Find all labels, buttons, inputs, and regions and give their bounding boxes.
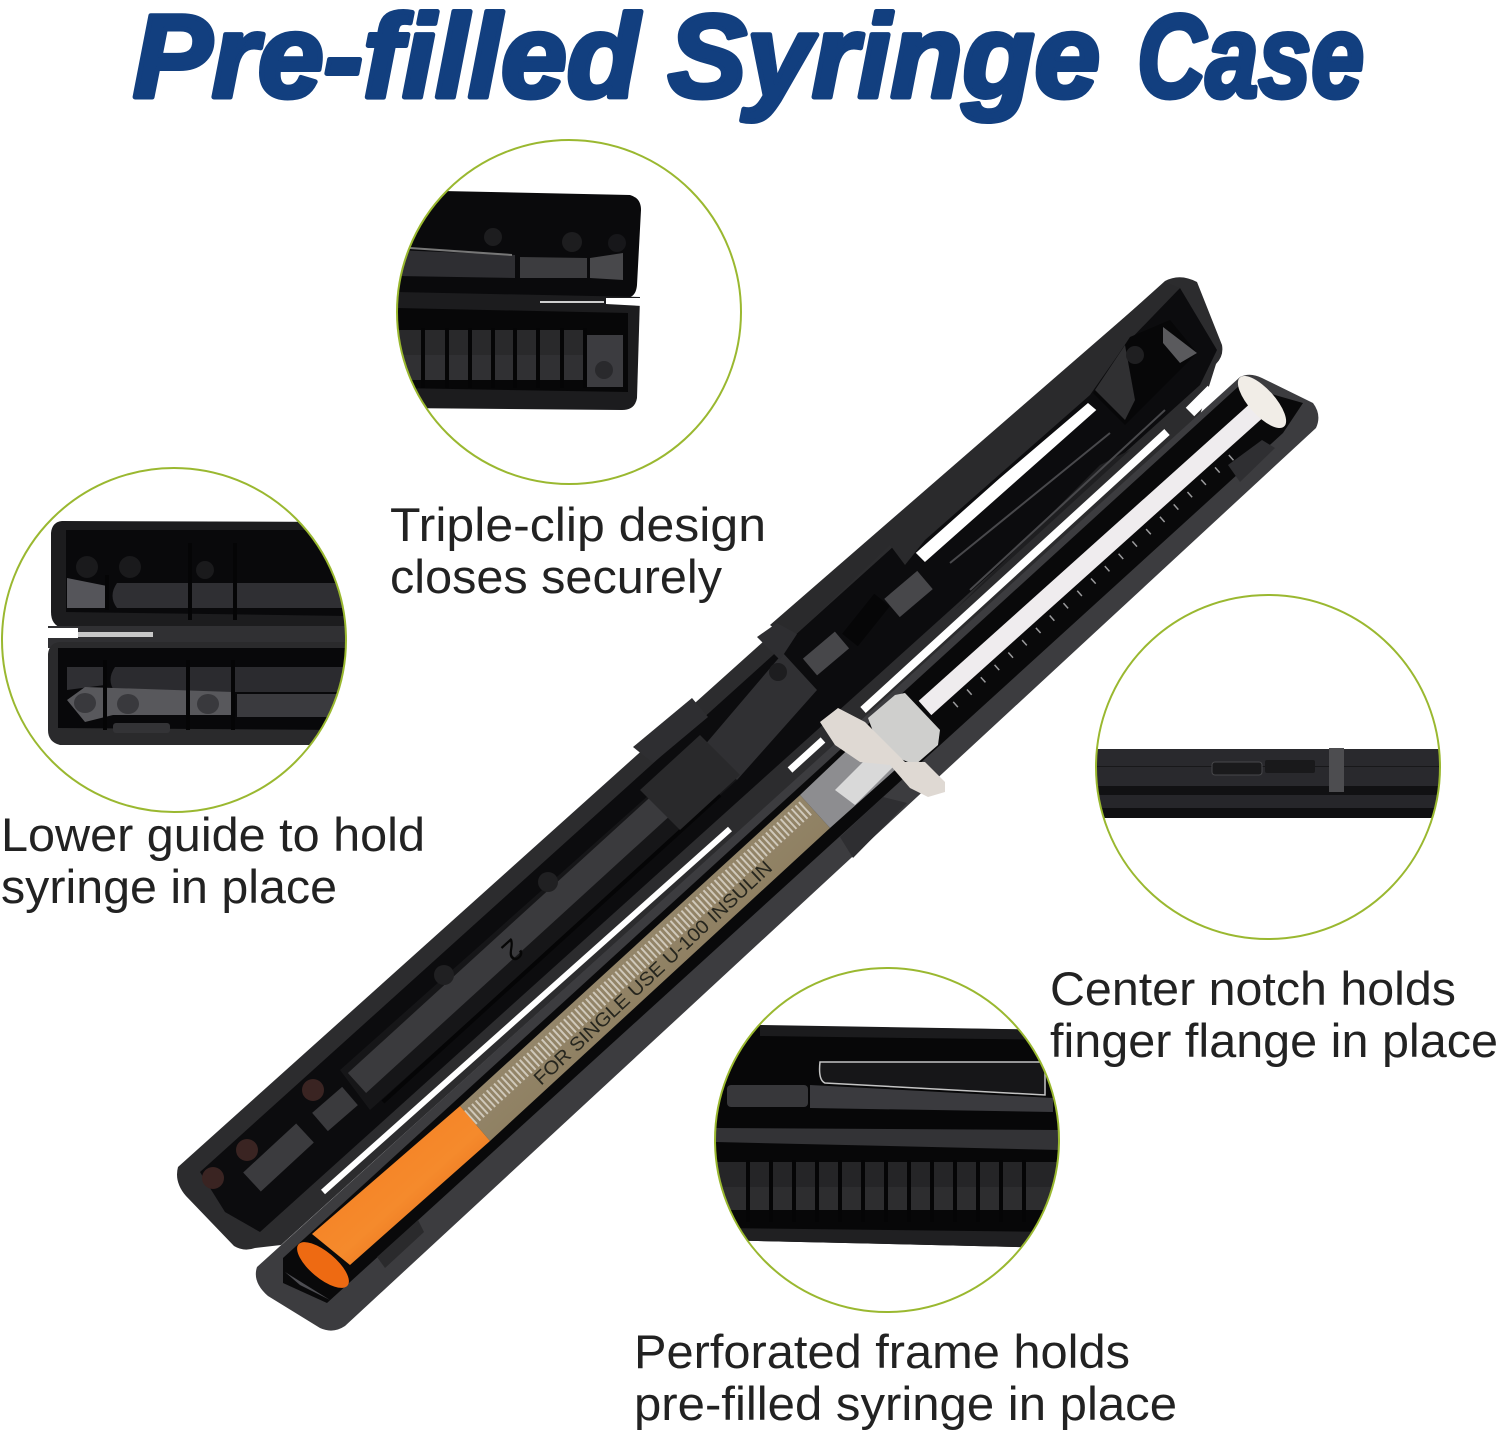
detail circle: center notch — [1096, 595, 1441, 939]
caption: center notch: Center notch holds — [1050, 962, 1456, 1015]
gap slits between halves — [323, 390, 1212, 1192]
main tube channel — [340, 745, 737, 1110]
detail circle: lower guide — [2, 468, 350, 812]
retaining clips — [1228, 440, 1275, 482]
barrel — [460, 795, 830, 1141]
head block — [1093, 320, 1197, 425]
caption: center notch — [1050, 962, 1498, 1067]
case clips — [633, 623, 907, 858]
caption: triple clip: Triple-clip design — [390, 498, 766, 551]
clear barrel end — [800, 738, 895, 828]
dome marks — [202, 1167, 224, 1189]
plunger — [925, 412, 1255, 708]
caption: lower guide: Lower guide to hold — [1, 808, 425, 861]
caption: center notch: finger flange in place — [1050, 1014, 1498, 1067]
ribbed top channel — [925, 450, 1130, 640]
barrel hub — [868, 693, 940, 765]
syringe case — [177, 277, 1318, 1331]
track ticks — [955, 447, 1243, 705]
pre-filled syringe — [290, 369, 1294, 1296]
caption: perforated frame — [634, 1325, 1177, 1430]
upper channel slit — [918, 405, 1094, 560]
title — [133, 0, 1364, 123]
end tube pieces — [252, 1133, 305, 1182]
caption: triple clip — [390, 498, 766, 603]
caption: triple clip: closes securely — [390, 550, 723, 603]
barrel print: FOR SINGLE USE U-100 INSULIN — [530, 857, 777, 1090]
caption: lower guide — [1, 808, 425, 913]
number mark: 2 — [495, 932, 529, 967]
center tube block — [703, 653, 817, 780]
detail circle: triple clip — [395, 140, 741, 484]
finger flange — [820, 708, 945, 797]
caption: perforated frame: pre-filled syringe in place — [634, 1377, 1177, 1430]
upper rim band — [770, 282, 1180, 640]
caption: perforated frame: Perforated frame holds — [634, 1325, 1130, 1378]
orange needle cap — [312, 1106, 490, 1265]
detail circle: perforated frame — [715, 968, 1060, 1312]
caption: lower guide: syringe in place — [1, 860, 337, 913]
case lower half — [256, 375, 1318, 1331]
case upper half — [177, 277, 1222, 1250]
